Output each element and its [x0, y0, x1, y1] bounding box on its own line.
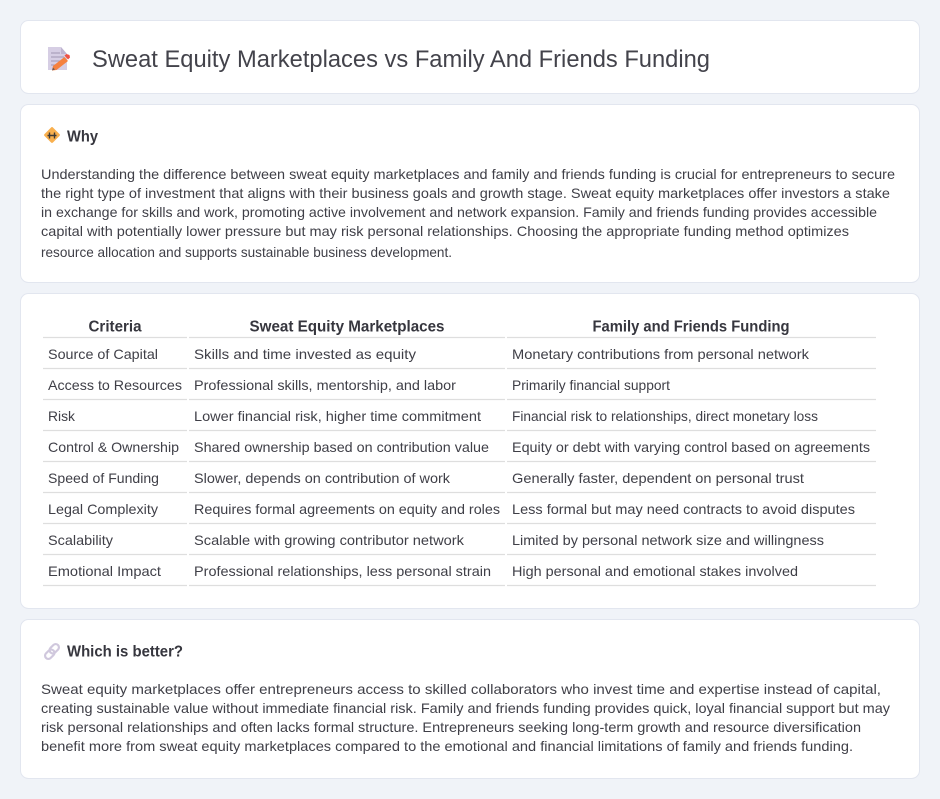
row: risk	[48, 408, 818, 424]
row: access to resources	[48, 377, 670, 393]
table header: Sweat Equity Marketplaces	[250, 318, 445, 336]
row: access to resources: Access to Resources	[48, 377, 182, 393]
row: speed of funding: Generally faster, dependent on personal trust	[512, 470, 804, 486]
row: risk: Financial risk to relationships, direct monetary loss	[512, 408, 818, 424]
row: speed of funding	[48, 470, 804, 486]
heading: why: Why	[67, 128, 98, 146]
which is better paragraph: benefit more from sweat equity marketplaces compared to the emotional and financial limitations of family and friends funding.	[41, 738, 853, 754]
row: scalability: Scalable with growing contributor network	[194, 532, 465, 548]
why paragraph: in exchange for skills and work, promoting active involvement and network expansion. Family and friends funding provides accessible	[41, 204, 877, 220]
panel: comparison table	[20, 294, 920, 608]
row: legal complexity: Legal Complexity	[48, 501, 158, 517]
panel: which is better	[20, 620, 920, 778]
row: legal complexity: Requires formal agreements on equity and roles	[194, 501, 500, 517]
row: source of capital: Source of Capital	[48, 346, 158, 362]
table rules	[43, 338, 876, 586]
row: scalability: Limited by personal network size and willingness	[512, 532, 824, 548]
row: legal complexity	[48, 501, 855, 517]
row: scalability: Scalability	[48, 532, 113, 548]
which is better paragraph: risk personal relationships and often lacks formal structure. Entrepreneurs seeking long-term growth and resource diversification	[41, 719, 861, 735]
table header: Criteria	[88, 318, 142, 336]
row: source of capital: Skills and time invested as equity	[194, 346, 416, 362]
row: access to resources: Primarily financial support	[512, 377, 670, 393]
row: access to resources: Professional skills, mentorship, and labor	[194, 377, 456, 393]
row: emotional impact	[48, 563, 798, 579]
row: scalability	[48, 532, 824, 548]
row: control and ownership: Equity or debt with varying control based on agreements	[512, 439, 870, 455]
why paragraph: the right type of investment that aligns with their business goals and growth stage. Sweat equity marketplaces offer investors a stake	[41, 185, 890, 201]
icon: chain link	[44, 643, 60, 660]
row: control and ownership	[48, 439, 870, 455]
which is better paragraph: creating sustainable value without immediate financial risk. Family and friends funding provides quick, loyal financial support but may	[41, 700, 890, 716]
row: emotional impact: Emotional Impact	[48, 563, 161, 579]
panel: title header	[20, 20, 920, 94]
why paragraph: capital with potentially lower pressure but may risk personal relationships. Choosing the appropriate funding method optimizes	[41, 223, 849, 239]
row: source of capital: Monetary contributions from personal network	[512, 346, 810, 362]
why paragraph: Understanding the difference between sweat equity marketplaces and family and friends funding is crucial for entrepreneurs to secure	[41, 166, 895, 182]
icon: diamond sign	[44, 127, 60, 143]
row: speed of funding: Slower, depends on contribution of work	[194, 470, 451, 486]
row: risk: Risk	[48, 408, 76, 424]
heading: which is better: Which is better?	[67, 644, 183, 660]
table header	[88, 318, 790, 336]
row: risk: Lower financial risk, higher time commitment	[194, 408, 481, 424]
table header: Family and Friends Funding	[592, 318, 790, 336]
row: emotional impact: High personal and emotional stakes involved	[512, 563, 798, 579]
row: legal complexity: Less formal but may need contracts to avoid disputes	[512, 501, 855, 517]
which is better paragraph: Sweat equity marketplaces offer entrepreneurs access to skilled collaborators who invest time and expertise instead of capital,	[41, 681, 881, 697]
title: Sweat Equity Marketplaces vs Family And Friends Funding	[92, 46, 710, 73]
why paragraph: resource allocation and supports sustainable business development.	[41, 244, 452, 260]
row: speed of funding: Speed of Funding	[48, 470, 159, 486]
row: control and ownership: Shared ownership based on contribution value	[194, 439, 489, 455]
icon: document with pencil	[48, 47, 70, 70]
panel: why	[20, 104, 920, 282]
row: control and ownership: Control & Ownership	[48, 439, 179, 455]
which is better paragraph	[41, 681, 890, 754]
row: emotional impact: Professional relationships, less personal strain	[194, 563, 491, 579]
why paragraph	[41, 166, 895, 260]
row: source of capital	[48, 346, 810, 362]
